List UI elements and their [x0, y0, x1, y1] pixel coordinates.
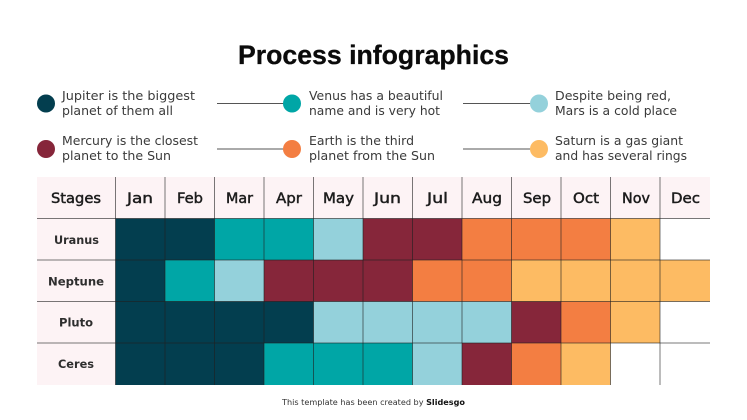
legend item: Mercury: planet to the Sun [62, 148, 171, 163]
table header row [37, 177, 710, 218]
table header row: Aug [472, 191, 502, 207]
legend item: Venus: name and is very hot [309, 103, 440, 118]
row: Uranus [37, 218, 660, 260]
legend [37, 88, 687, 163]
title: Process infographics [238, 40, 509, 70]
legend item: Mars [463, 88, 677, 118]
legend item: Saturn: Saturn is a gas giant [555, 133, 683, 148]
legend item: Jupiter [37, 88, 195, 118]
table header row: Dec [671, 191, 700, 207]
row: Ceres: Ceres [58, 357, 94, 371]
row: Uranus: Uranus [54, 233, 99, 247]
table header row: Mar [226, 191, 253, 207]
legend item: Mercury: Mercury is the closest [62, 133, 198, 148]
table header row: Jul [426, 191, 448, 207]
row: Neptune: Neptune [48, 274, 104, 288]
table header row: Oct [573, 191, 600, 207]
footer credit: This template has been created by Slidesgo [281, 398, 466, 407]
table header row: Nov [622, 191, 650, 207]
legend item: Jupiter: planet of them all [62, 103, 173, 118]
legend item: Mars: Despite being red, [555, 88, 671, 103]
row: Pluto [37, 302, 660, 343]
legend item: Earth: planet from the Sun [309, 148, 435, 163]
row: Ceres [37, 343, 610, 385]
legend item: Saturn: and has several rings [555, 148, 687, 163]
table header row: May [323, 191, 354, 207]
table header row: Sep [523, 191, 551, 207]
legend item: Mars: Mars is a cold place [555, 103, 677, 118]
legend item: Venus [217, 88, 443, 118]
row: Neptune [37, 260, 710, 302]
table header row: Jun [373, 191, 401, 207]
table header row: Jan [126, 191, 153, 207]
legend item: Venus: Venus has a beautiful [309, 88, 443, 103]
table header row: Feb [177, 191, 203, 207]
legend item: Jupiter: Jupiter is the biggest [61, 88, 195, 103]
row: Pluto: Pluto [59, 316, 93, 330]
legend item: Earth [217, 133, 435, 163]
table header row: Apr [276, 191, 302, 207]
table [37, 177, 710, 385]
legend item: Saturn [463, 133, 687, 163]
table header row: Stages [51, 191, 101, 207]
legend item: Earth: Earth is the third [309, 133, 414, 148]
legend item: Mercury [37, 133, 198, 163]
